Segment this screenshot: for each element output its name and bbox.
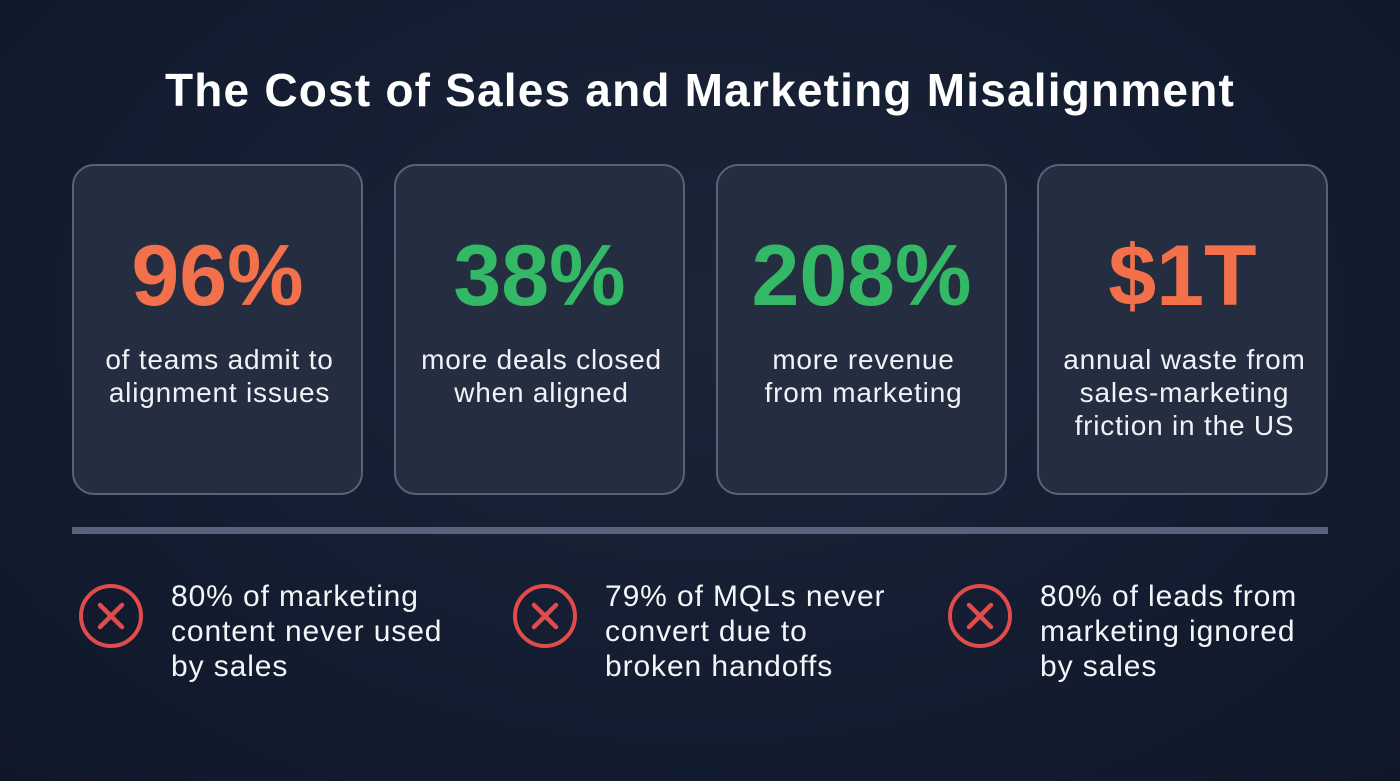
card: 96%: of teams admit to <box>105 344 334 375</box>
title: The Cost of Sales and Marketing Misalignment <box>165 64 1235 116</box>
card: 96%: alignment issues <box>109 377 330 408</box>
card: 38%: when aligned <box>454 377 629 408</box>
item: leads ignored: marketing ignored <box>1040 615 1295 648</box>
card: $1T: friction in the US <box>1075 410 1294 441</box>
icon: x circle <box>513 584 577 648</box>
item: leads ignored <box>948 580 1297 683</box>
card: 38% <box>394 164 685 495</box>
card: 208% <box>716 164 1007 495</box>
card: 96%: 96% <box>131 228 304 324</box>
item: MQLs: convert due to <box>605 615 808 648</box>
icon: x circle <box>79 584 143 648</box>
card: 208%: 208% <box>752 228 971 324</box>
item: MQLs: 79% of MQLs never <box>605 580 885 613</box>
card: $1T: $1T <box>1108 228 1257 324</box>
card: $1T: annual waste from <box>1063 344 1306 375</box>
item: marketing content: by sales <box>171 650 288 683</box>
item: MQLs: broken handoffs <box>605 650 833 683</box>
item: leads ignored: by sales <box>1040 650 1157 683</box>
card: 96% <box>72 164 363 495</box>
card: $1T: sales-marketing <box>1080 377 1289 408</box>
card: 208%: from marketing <box>765 377 962 408</box>
card: 208%: more revenue <box>772 344 955 375</box>
card: 38%: 38% <box>453 228 626 324</box>
item: MQLs <box>513 580 885 683</box>
item: marketing content: 80% of marketing <box>171 580 419 613</box>
item: marketing content: content never used <box>171 615 442 648</box>
item: leads ignored: 80% of leads from <box>1040 580 1297 613</box>
card: $1T <box>1037 164 1328 495</box>
item: marketing content <box>79 580 442 683</box>
card: 38%: more deals closed <box>421 344 662 375</box>
icon: x circle <box>948 584 1012 648</box>
